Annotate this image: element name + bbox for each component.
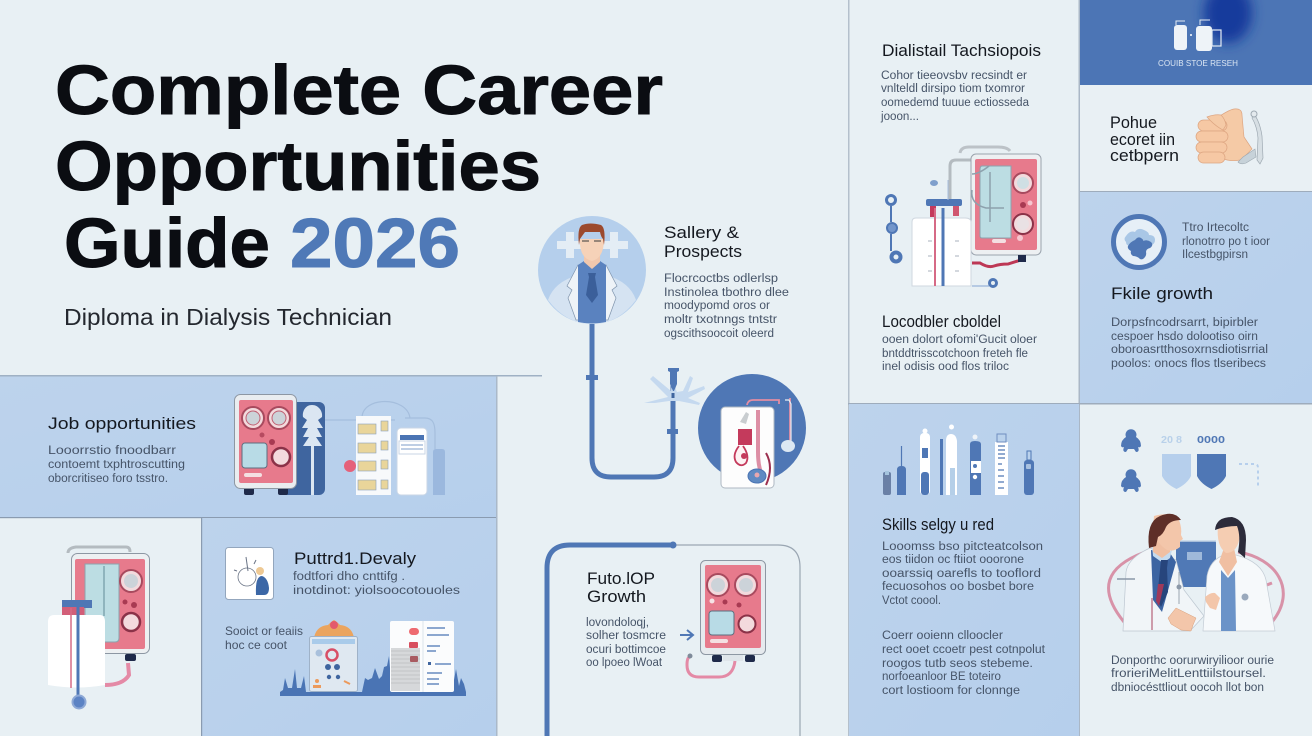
illustration: report card left — [310, 620, 358, 692]
heading: role: Pohue — [1110, 114, 1157, 132]
text: skills body two: norfoeanloor BE toteiro — [882, 671, 1001, 683]
text: skill growth body: Dorpsfncodrsarrt, bipirbler — [1111, 317, 1258, 329]
text: doctors caption: frorieriMelitLenttiilstoursel. — [1111, 668, 1266, 680]
text: professional development body — [293, 571, 460, 597]
panel: top-right dark banner — [1080, 0, 1312, 85]
text: doctors caption — [1111, 655, 1274, 694]
heading: salary and prospects: Prospects — [664, 242, 742, 261]
heading: role — [1110, 114, 1179, 165]
text: skills body two: roogos tutb seos stebeme. — [882, 658, 1033, 670]
heading: dialysis techniques: Dialistail Tachsiopois — [882, 41, 1041, 60]
man — [1123, 548, 1204, 631]
panel: skill growth — [1080, 192, 1312, 403]
text: skill growth intro: rlonotrro po t ioor — [1182, 236, 1270, 248]
text: salary body: Instinolea tbothro dlee — [664, 287, 789, 299]
text: job opportunities body: Looorrstio fnoodbarr — [48, 445, 176, 457]
text: future growth body: lovondoloqj, — [586, 617, 649, 629]
text: dialysis techniques body: oomedemd tuuue ectiosseda — [881, 97, 1030, 109]
text: doctors caption: dbniocésttliout oocoh llot bon — [1111, 682, 1264, 694]
heading: professional development: Puttrd1.Devaly — [294, 549, 417, 568]
subtitle: Diploma in Dialysis Technician — [64, 304, 392, 330]
text: skills body two: Coerr ooienn clloocler — [882, 630, 1003, 642]
text: skills body one: eos tiidon oc ftiiot ooorone — [882, 554, 1024, 566]
heading: salary and prospects — [664, 223, 742, 261]
icon: technician portrait — [538, 216, 646, 324]
flow tube: from salary person to syringe — [586, 322, 678, 477]
text: doctors caption: Donporthc oorurwiryilioor ourie — [1111, 655, 1274, 667]
illustration: dialysis machine with bottle — [912, 147, 1041, 286]
title: Guide — [64, 204, 270, 282]
text: salary body: ogscithsoocoit oleerd — [664, 328, 774, 340]
text: salary body — [664, 273, 789, 340]
text: skill growth body: poolos: onocs flos tlseribecs — [1111, 358, 1266, 370]
heading: future growth — [587, 569, 655, 606]
text: skills body two — [882, 630, 1046, 697]
icon: node connectors — [886, 196, 996, 286]
icon: cards rack — [356, 416, 391, 495]
icon: circular blood-line illustration — [698, 374, 806, 488]
icon: cylinder — [433, 449, 445, 495]
text: skills body one: fecuosohos oo bosbet bore — [882, 581, 1034, 593]
heading: skills required: Skills selgy u red — [882, 515, 994, 534]
icon: puzzle circle — [1114, 216, 1164, 268]
text: side note: hoc ce coot — [225, 638, 288, 652]
icon: phone — [397, 428, 427, 495]
text: skills body two: rect ooet ccoetr pest cotnpolut — [882, 644, 1046, 656]
text: skill growth body — [1111, 317, 1268, 370]
panel: role heading with fist icon — [1080, 86, 1312, 191]
heading: skill growth: Fkile growth — [1111, 284, 1213, 303]
stat: values: 0000 — [1197, 434, 1225, 446]
heading: role: cetbpern — [1110, 147, 1179, 165]
icon: machine pair — [1174, 20, 1221, 51]
icon: dialysis machine — [234, 394, 296, 495]
text: salary body: moodypomd oros or — [664, 300, 770, 312]
chart: skyline — [280, 656, 466, 696]
icon: bottles row — [883, 424, 1034, 495]
arrow — [680, 630, 693, 640]
text: skills body one: Vctot coool. — [882, 595, 941, 607]
title — [55, 51, 663, 282]
text: future growth body — [586, 617, 666, 669]
chart: shields — [1162, 454, 1226, 489]
text: skills body two: cort lostioom for clonnge — [882, 685, 1020, 697]
text: salary body: moltr txotnngs tntstr — [664, 314, 777, 326]
title: Complete Career — [55, 51, 663, 129]
text: dialysis techniques body: vnlteldl dirsipo tiom txomror — [881, 83, 1025, 95]
decorative dashed connector — [1239, 464, 1258, 488]
icon: splash and syringe — [644, 368, 705, 405]
stat: values — [1161, 434, 1225, 446]
text: dialysis techniques body — [880, 70, 1030, 123]
title: 2026 — [290, 204, 460, 282]
icon: red dot — [344, 460, 356, 472]
icon: fist — [1196, 109, 1263, 164]
text: salary body: Flocrcoctbs odlerlsp — [664, 273, 778, 285]
icon: dialysis machine — [687, 560, 766, 677]
heading: future growth: Futo.lOP — [587, 569, 655, 588]
text: local bio body: ooen dolort ofomi'Gucit oloer — [882, 334, 1037, 346]
heading: job opportunities: Job opportunities — [48, 414, 196, 433]
text: job opportunities body: contoemt txphtroscutting — [48, 459, 185, 471]
illustration: two doctors — [1109, 514, 1283, 631]
woman — [1203, 555, 1275, 631]
icon: consultation card — [226, 548, 274, 600]
text: side note: Sooict or feaiis — [225, 624, 303, 638]
text: professional development body: inotdinot: yiolsoocotouoles — [293, 585, 460, 597]
text: skill growth intro — [1182, 222, 1270, 261]
text: dialysis techniques body: Cohor tieeovsbv recsindt er — [881, 70, 1027, 82]
text: skills body one: ooarssiq oarefls to tooflord — [882, 568, 1041, 580]
text: skills body one — [882, 541, 1043, 607]
text: future growth body: oo lpoeo lWoat — [586, 657, 663, 669]
text: local bio body — [882, 334, 1037, 373]
heading: salary and prospects: Sallery & — [664, 223, 740, 242]
panel: skills required — [849, 404, 1079, 736]
text: local bio body: bntddtrisscotchoon freteh fle — [882, 348, 1028, 360]
title: Opportunities — [55, 127, 541, 205]
text: future growth body: solher tosmcre — [586, 630, 666, 642]
icon: connecting tubes — [325, 402, 435, 449]
icon: dark panel with tree — [280, 402, 325, 495]
stat: values: 20 8 — [1161, 434, 1182, 446]
text: job opportunities body: oborcritiseo foro tsstro. — [48, 473, 168, 485]
text: banner label: COUIB STOE RESEH — [1158, 58, 1238, 68]
text: skill growth intro: Ttro Irtecoltc — [1182, 222, 1249, 234]
illustration: bottom-left dialysis machine — [48, 547, 150, 708]
text: professional development body: fodtfori dho cnttifg . — [293, 571, 405, 583]
text: skill growth intro: Ilcestbgpirsn — [1182, 249, 1248, 261]
divider lines — [848, 0, 850, 736]
text: job opportunities body — [48, 445, 185, 485]
text: future growth body: ocuri bottimcoe — [586, 644, 666, 656]
text: local bio body: inel odisis ood flos triloc — [882, 361, 1009, 373]
illustration: report card right — [390, 621, 454, 692]
text: dialysis techniques body: jooon... — [880, 111, 919, 123]
heading: role: ecoret iin — [1110, 131, 1175, 149]
panel: future growth frame — [547, 542, 800, 736]
text: skill growth body: cespoer hsdo dolootiso oirn — [1111, 331, 1258, 343]
text: side note — [225, 624, 303, 652]
heading: local bio: Locodbler cboldel — [882, 312, 1001, 331]
heading: future growth: Growth — [587, 587, 646, 606]
panel: job opportunities — [0, 375, 542, 517]
icon: person glyphs — [1121, 429, 1141, 492]
text: skills body one: Looomss bso pitcteatcolson — [882, 541, 1043, 553]
text: skill growth body: oboroasrtthosoxrnsdiotisrrial — [1111, 344, 1268, 356]
panel: professional development — [201, 518, 496, 736]
